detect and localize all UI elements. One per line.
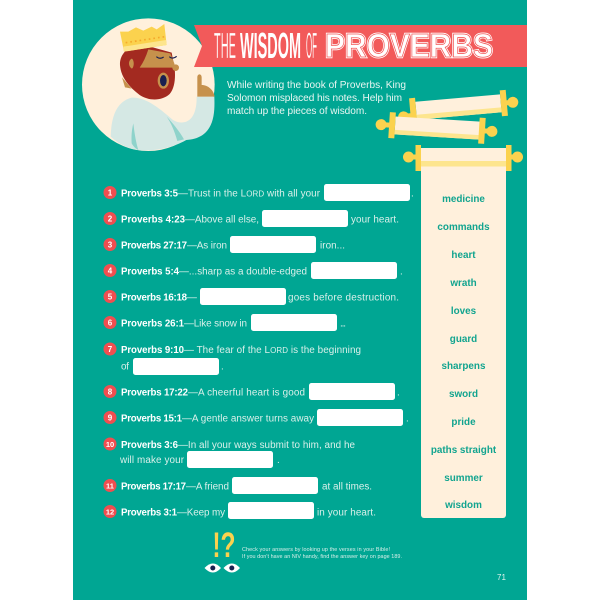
item 4: .	[400, 266, 403, 278]
title: Proverbs: PROVERBS	[325, 27, 493, 64]
intro text: match up the pieces of wisdom.	[227, 106, 367, 117]
item 10: —In all your ways submit to him, and he	[178, 440, 356, 451]
title: The Wisdom of: WISDOM	[240, 25, 301, 66]
item 9: .	[406, 414, 409, 424]
item 6: —Like snow in	[184, 318, 247, 330]
item 5: Proverbs 16:18	[121, 292, 188, 304]
item 7: of	[121, 362, 129, 372]
item 1: .	[411, 188, 414, 200]
item 8	[104, 383, 400, 400]
icon: eyes	[204, 564, 240, 572]
item 8: .	[397, 388, 400, 398]
word list: paths straight	[431, 445, 497, 456]
intro text	[227, 80, 406, 117]
item 3: 3	[108, 240, 113, 250]
teal page background	[73, 0, 527, 600]
icon: rolled scroll front	[375, 111, 498, 145]
item 7: Proverbs 9:10	[121, 345, 184, 356]
item 6: ...	[340, 318, 346, 330]
item 7: — The fear of the LORD is the beginning	[184, 345, 361, 356]
intro text: Solomon misplaced his notes. Help him	[227, 93, 402, 104]
item 12	[104, 502, 376, 519]
illustration: King Solomon portrait	[82, 18, 215, 151]
item 8: Proverbs 17:22	[121, 388, 188, 398]
intro text: While writing the book of Proverbs, King	[227, 80, 406, 91]
title banner	[194, 25, 527, 67]
icon: exclamation and question marks: ?	[220, 526, 236, 565]
footer note: Check your answers by looking up the verses in your Bible!	[242, 547, 390, 553]
title banner: OF	[306, 25, 317, 66]
item 5	[104, 288, 399, 305]
item 9	[104, 409, 409, 426]
item 11	[104, 477, 372, 494]
footer note: If you don't have an NIV handy, find the answer key on page 189.	[242, 554, 402, 560]
item 8: —A cheerful heart is good	[188, 388, 305, 398]
item 3: Proverbs 27:17	[121, 240, 187, 252]
item 3: —As iron	[187, 240, 227, 252]
item 2: your heart.	[351, 214, 399, 226]
item 10: 10	[106, 440, 114, 449]
item 12: —Keep my	[177, 508, 225, 518]
item 2: 2	[108, 214, 113, 224]
item 12: Proverbs 3:1	[121, 508, 178, 518]
word list: sharpens	[442, 361, 486, 372]
word list: medicine	[442, 194, 485, 205]
item 4: Proverbs 5:4	[121, 266, 180, 278]
word list: summer	[444, 473, 483, 484]
item 6	[104, 314, 346, 331]
item 9: Proverbs 15:1	[121, 414, 183, 424]
item 9: 9	[108, 414, 113, 422]
item 5: —	[187, 292, 197, 304]
title: Proverbs: PROVERBS	[325, 27, 493, 64]
word list: sword	[449, 389, 478, 400]
icon: exclamation and question marks	[212, 526, 236, 565]
word list: wrath	[449, 278, 477, 289]
item 7	[104, 342, 361, 375]
item 10	[104, 438, 356, 468]
page number: 71	[497, 573, 506, 582]
word list: heart	[451, 250, 476, 261]
item 4: —...sharp as a double-edged	[179, 266, 307, 278]
item 5: goes before destruction.	[288, 292, 399, 304]
title: The Wisdom of	[214, 25, 317, 66]
panel: word bank scroll	[403, 145, 523, 518]
item 5: 5	[108, 292, 113, 302]
icon: rolled scroll back	[397, 89, 519, 125]
item 11: —A friend	[186, 482, 229, 492]
item 2: Proverbs 4:23	[121, 214, 186, 226]
word list: pride	[451, 417, 476, 428]
item 11: Proverbs 17:17	[121, 482, 186, 492]
item 3: iron...	[320, 240, 345, 252]
item 3	[104, 236, 345, 253]
item 7: .	[221, 362, 224, 372]
item 2: —Above all else,	[185, 214, 259, 226]
icon: exclamation and question marks: !	[212, 526, 220, 565]
word list: commands	[437, 222, 490, 233]
item 12: in your heart.	[317, 508, 376, 518]
item 12: 12	[106, 508, 114, 516]
item 10: will make your	[119, 455, 185, 466]
item 4: 4	[108, 266, 113, 276]
item 11: at all times.	[322, 482, 372, 492]
footer note	[242, 547, 402, 560]
item 4	[104, 262, 403, 279]
item 6: 6	[108, 318, 113, 328]
item 11: 11	[106, 482, 114, 490]
item 1: —Trust in the LORD with all your	[178, 188, 321, 200]
item 10: .	[277, 455, 280, 466]
item 1	[104, 184, 414, 201]
item 2	[104, 210, 399, 227]
item 7: 7	[108, 345, 113, 354]
title: The Wisdom of: THE	[214, 25, 236, 66]
item 6: Proverbs 26:1	[121, 318, 185, 330]
item 8: 8	[108, 388, 113, 396]
item 10: Proverbs 3:6	[121, 440, 179, 451]
item 1: Proverbs 3:5	[121, 188, 179, 200]
word list: loves	[451, 306, 477, 317]
item 9: —A gentle answer turns away	[182, 414, 314, 424]
item 1: 1	[108, 188, 113, 198]
word list: wisdom	[444, 500, 482, 511]
word list	[431, 194, 497, 511]
word list: guard	[450, 334, 477, 345]
